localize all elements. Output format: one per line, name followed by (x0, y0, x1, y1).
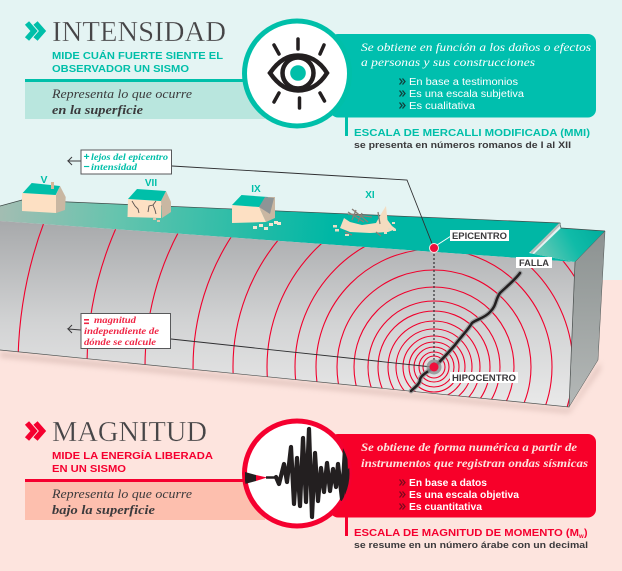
callout: magnitude independent: dónde se calcule (84, 338, 157, 348)
house: V (22, 174, 66, 213)
text: intensidad description: Se obtiene en función a los daños o efectos (361, 40, 591, 54)
diagram: earth block (0, 200, 606, 414)
list: magnitud traits (400, 478, 519, 513)
band: represents below surface (25, 479, 265, 520)
house: IX (232, 184, 281, 230)
label: falla: FALLA (519, 258, 550, 268)
callout: distance from epicentre: lejos del epicentro (91, 153, 168, 163)
scale: mercalli: ESCALA DE MERCALLI MODIFICADA (MMI) (354, 127, 590, 139)
section: intensidad header (25, 16, 265, 119)
house: XI ruined: XI (365, 190, 375, 201)
title: magnitud: MAGNITUD (52, 416, 207, 448)
subtitle: intensidad: MIDE CUÁN FUERTE SIENTE EL (52, 49, 224, 62)
house: VII: VII (145, 178, 157, 189)
section: magnitud header (25, 416, 265, 520)
marker: epicentro (430, 230, 509, 252)
block shadow (0, 352, 600, 413)
subtitle: intensidad: OBSERVADOR UN SISMO (52, 63, 189, 75)
scale: momento: ESCALA DE MAGNITUD DE MOMENTO (M (354, 527, 579, 539)
list: intensidad traits: Es una escala subjetiva (409, 89, 524, 100)
band: represents surface: Representa lo que ocurre (51, 87, 192, 101)
icon: teal chevrons (27, 23, 42, 39)
title: intensidad: INTENSIDAD (52, 16, 226, 48)
marker: hipocentro (426, 360, 518, 383)
list: intensidad traits: En base a testimonios (409, 77, 518, 88)
icon: red chevrons (27, 423, 42, 439)
marker: epicentro: EPICENTRO (452, 231, 507, 241)
callout: distance from epicentre (68, 150, 433, 246)
text: magnitud description: instrumentos que registran ondas sísmicas (361, 456, 588, 470)
band: represents below surface: bajo la superficie (52, 503, 156, 517)
seismic waves (18, 224, 574, 406)
panel: intensidad description (330, 34, 596, 118)
list: magnitud traits: Es una escala objetiva (409, 490, 519, 501)
scale: mercalli (345, 117, 590, 151)
subtitle: intensidad (52, 49, 224, 75)
band: represents surface (25, 79, 265, 119)
callout: distance from epicentre: − (84, 161, 90, 173)
callout: distance from epicentre: + (84, 151, 90, 163)
epicentre to hypocentre dotted line (433, 250, 435, 364)
list: magnitud traits: En base a datos (409, 478, 487, 489)
subtitle: magnitud: EN UN SISMO (52, 463, 126, 475)
house: IX: IX (251, 184, 261, 195)
scale: momento: w (578, 534, 584, 540)
icon: eye in circle (244, 21, 350, 126)
callout: magnitude independent: magnitud (94, 316, 136, 326)
list: intensidad traits (400, 77, 524, 112)
house: V: V (40, 174, 48, 186)
block bottom outline (0, 262, 575, 407)
block front face (0, 221, 575, 407)
house: XI ruined (333, 190, 396, 236)
background: intensity zone (0, 0, 622, 281)
list: intensidad traits: Es cualitativa (409, 101, 475, 112)
callout: magnitude independent (68, 314, 432, 367)
house: VII (128, 178, 171, 222)
text: magnitud description: Se obtiene de forma numérica a partir de (361, 440, 578, 454)
scale: momento: se resume en un número árabe con un decimal (354, 540, 588, 551)
icon: seismogram in circle (244, 421, 350, 526)
panel: magnitud description (330, 434, 596, 518)
fault crack (411, 273, 520, 391)
subtitle: magnitud (52, 449, 213, 475)
scale: momento (345, 517, 588, 551)
text: intensidad description (361, 40, 591, 69)
scale: mercalli: se presenta en números romanos de I al XII (354, 140, 571, 151)
band: represents surface: en la superficie (52, 103, 144, 117)
text: intensidad description: a personas y sus construcciones (361, 55, 535, 69)
list: magnitud traits: Es cuantitativa (409, 502, 482, 513)
scale: momento: ) (584, 527, 588, 539)
block surface (0, 200, 605, 262)
marker: hipocentro: HIPOCENTRO (452, 373, 516, 383)
callout: magnitude independent: independiente de (84, 327, 160, 337)
block right face (569, 231, 605, 407)
text: magnitud description (361, 440, 588, 470)
callout: distance from epicentre: intensidad (91, 163, 137, 173)
background: magnitude zone (0, 280, 622, 571)
subtitle: magnitud: MIDE LA ENERGÍA LIBERADA (52, 449, 213, 462)
band: represents below surface: Representa lo que ocurre (51, 487, 192, 501)
